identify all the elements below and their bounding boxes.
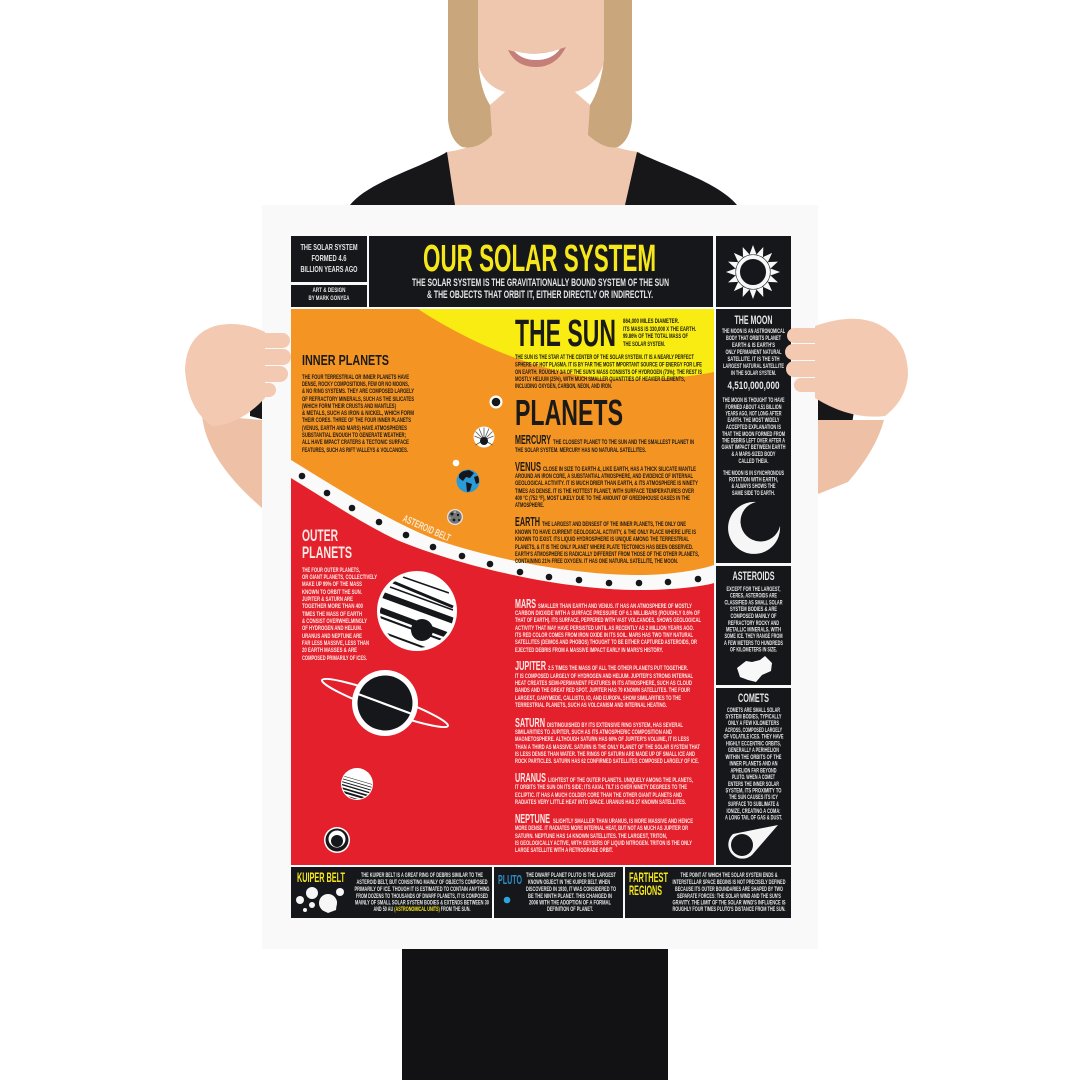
- text: jupiter: LARGEST, GANYMEDE, CALLISTO, IO, AND EUROPA, SHOW SIMILARITIES TO THE: [515, 695, 681, 702]
- icon: mercury: [490, 396, 502, 408]
- panel: title: & THE OBJECTS THAT ORBIT IT, EITHER DIRECTLY OR INDIRECTLY.: [427, 289, 653, 301]
- text: earth: CONTAINING 21% FREE OXYGEN. IT HAS ONE NATURAL SATELLITE, THE MOON.: [515, 558, 678, 565]
- text: inner planets: OF REFRACTORY MINERALS, SUCH AS THE SILICATES: [302, 396, 414, 403]
- panel: kuiper belt: MAINLY OF SMALL SOLAR SYSTEM BODIES & EXTENDS BETWEEN 30: [355, 900, 489, 906]
- text: outer planets: PLANETS: [302, 543, 352, 562]
- text: inner planets: ALL HAVE IMPACT CRATERS & TECTONIC SURFACE: [302, 439, 409, 446]
- panel: pluto: KNOWN OBJECT IN THE KUIPER BELT. WHEN: [528, 879, 610, 886]
- panel: pluto: BE THE NINTH PLANET. THIS CHANGED IN: [528, 893, 612, 900]
- panel: comets: COMETS ARE SMALL SOLAR: [727, 707, 780, 714]
- text: earth: KNOWN TO EXIST. ITS LIQUID HYDROSPHERE IS UNIQUE AMONG THE TERRESTRIAL: [515, 536, 689, 543]
- text: sun facts: 99.86% OF THE TOTAL MASS OF: [623, 333, 688, 340]
- panel: comets: PLUTO. WHEN A COMET: [732, 774, 775, 781]
- text: mars: THAT OF EARTH). ITS SURFACE, PEPPERED WITH VAST VOLCANOES, SHOWS GEOLOGICAL: [515, 617, 701, 624]
- icon: venus: [474, 426, 494, 448]
- panel: asteroids: OF KILOMETERS IN SIZE.: [730, 646, 777, 654]
- text: neptune: SATURN. NEPTUNE HAS 14 KNOWN SATELLITES. THE LARGEST, TRITON,: [515, 833, 667, 840]
- text: uranus: LIGHTEST OF THE OUTER PLANETS. UNIQUELY AMONG THE PLANETS,: [548, 777, 693, 784]
- text: mars: MARS: [515, 596, 536, 611]
- panel: kuiper belt: [291, 867, 492, 918]
- panel: kuiper belt: PRIMARILY OF ICE. THOUGH IT IS ESTIMATED TO CONTAIN ANYTHING: [354, 886, 490, 893]
- panel: kuiper belt: AND 50 AU (ASTRONOMICAL UNITS) FROM THE SUN.: [374, 906, 471, 913]
- label: asteroid belt: ASTEROID BELT: [401, 513, 453, 545]
- icon: earth: [456, 470, 481, 492]
- panel: asteroids: CLASSIFIED AS SMALL SOLAR: [724, 600, 783, 606]
- poster sheet: [262, 205, 818, 949]
- panel: the moon: THAT THE MOON FORMED FROM: [722, 431, 785, 438]
- icon: crescent moon: [728, 502, 780, 554]
- panel: pluto: PLUTO: [498, 872, 522, 887]
- panel: comets: A LONG TAIL OF GAS & DUST.: [725, 814, 782, 822]
- panel: pluto: DISCOVERED IN 1930, IT WAS CONSIDERED TO: [526, 886, 616, 893]
- panel: the moon: & ALWAYS SHOWS THE: [732, 483, 776, 490]
- text: sun facts: ITS MASS IS 330,000 X THE EARTH.: [623, 326, 696, 333]
- heading: planets: PLANETS: [515, 392, 623, 433]
- text: venus: TIMES AS DENSE. IT IS THE HOTTEST PLANET, WITH SURFACE TEMPERATURES OVER: [515, 488, 694, 495]
- panel: the moon: SATELLITE. IT IS THE 5TH: [728, 356, 780, 363]
- text: earth: KNOWN TO HAVE CURRENT GEOLOGICAL ACTIVITY, & THE ONLY PLACE WHERE LIFE IS: [515, 529, 696, 536]
- text: mercury: THE CLOSEST PLANET TO THE SUN AND THE SMALLEST PLANET IN: [553, 439, 694, 446]
- panel: pluto: THE DWARF PLANET PLUTO IS THE LARGEST: [526, 872, 616, 879]
- text: venus: CLOSE IN SIZE TO EARTH &, LIKE EARTH, HAS A THICK SILICATE MANTLE: [543, 466, 696, 473]
- text: jupiter: [515, 658, 693, 709]
- panel: the moon: THE MOON IS IN SYNCHRONOUS: [723, 470, 784, 477]
- text: earth: EARTH: [515, 514, 540, 529]
- text: uranus: [515, 770, 693, 806]
- panel: formation note: [291, 236, 367, 282]
- text: jupiter: 2.5 TIMES THE MASS OF ALL THE OTHER PLANETS PUT TOGETHER.: [548, 665, 688, 672]
- panel: comets: HIGHLY ECCENTRIC ORBITS,: [726, 740, 781, 748]
- panel: title: THE SOLAR SYSTEM IS THE GRAVITATIONALLY BOUND SYSTEM OF THE SUN: [412, 277, 669, 289]
- icon: comet: [728, 825, 778, 859]
- panel: the moon: BODY THAT ORBITS PLANET: [726, 335, 781, 342]
- panel: formation note: THE SOLAR SYSTEM: [300, 243, 358, 252]
- text: neptune: MORE DENSE. IT RADIATES MORE INTERNAL HEAT, BUT NOT AS MUCH AS JUPITER OR: [515, 825, 688, 832]
- panel: the moon: YEARS AGO, NOT LONG AFTER: [726, 410, 782, 418]
- panel: the moon: THE MOON IS AN ASTRONOMICAL: [722, 328, 785, 335]
- text: outer planets: COMPOSED PRIMARILY OF ICES.: [302, 655, 367, 662]
- panel: the moon: IN THE SOLAR SYSTEM.: [731, 370, 776, 377]
- text: venus: VENUS: [515, 459, 541, 474]
- panel: the moon: ACCEPTED EXPLANATION IS: [726, 424, 781, 431]
- text: neptune: LARGE SATELLITE WITH A RETROGRADE ORBIT.: [515, 847, 613, 854]
- text: outer planets: OF HYDROGEN AND HELIUM.: [302, 625, 362, 632]
- text: venus: GEOLOGICAL ACTIVITY. IT IS MUCH DRIER THAN EARTH, & ITS ATMOSPHERE IS NINETY: [515, 480, 698, 487]
- text: inner planets: (VENUS, EARTH AND MARS) HAVE ATMOSPHERES: [302, 425, 407, 432]
- panel: comets: THE SUN CAUSES ITS ICY: [729, 794, 778, 801]
- panel: farthest regions: FARTHEST: [629, 869, 668, 885]
- text: outer planets: THE FOUR OUTER PLANETS,: [302, 567, 360, 574]
- text: mars: [515, 596, 701, 654]
- text: mercury: THE SOLAR SYSTEM. MERCURY HAS NO NATURAL SATELLITES.: [515, 447, 646, 454]
- panel: credit: ART & DESIGN: [312, 287, 346, 294]
- panel: comets: APHELION FAR BEYOND: [730, 768, 777, 774]
- text: saturn: SATURN: [515, 715, 545, 730]
- panel: the moon: GIANT IMPACT BETWEEN EARTH: [722, 444, 786, 451]
- text: mars: ITS RED COLOR COMES FROM IRON OXIDE IN ITS SOIL. MARS HAS TWO TINY NATURAL: [515, 632, 693, 639]
- model hand: right: [785, 319, 908, 417]
- panel: farthest regions: GRAVITY. THE LIMIT OF THE SOLAR WIND'S INFLUENCE IS: [672, 900, 786, 906]
- panel: asteroids: COMPOSED MAINLY OF: [730, 613, 776, 620]
- text: mars: SATELLITES (DEIMOS AND PHOBOS) THOUGHT TO BE EITHER CAPTURED ASTEROIDS, OR: [515, 639, 697, 646]
- panel: pluto: DEFINITION OF PLANET.: [547, 906, 593, 913]
- panel: comets: SYSTEM BODIES, TYPICALLY: [726, 714, 782, 720]
- panel: asteroids: [716, 566, 791, 685]
- panel: comets: [716, 688, 791, 865]
- text: inner planets: [302, 352, 414, 454]
- text: sun facts: 864,000 MILES DIAMETER.: [623, 318, 679, 325]
- icon: asteroid: [737, 656, 772, 682]
- heading: the sun: THE SUN: [515, 313, 616, 355]
- panel: credit: BY MARK GONYEA: [308, 295, 350, 302]
- text: outer planets: KNOWN TO ORBIT THE SUN.: [302, 589, 362, 596]
- panel: title: OUR SOLAR SYSTEM: [423, 238, 656, 280]
- text: uranus: URANUS: [515, 770, 546, 785]
- text: jupiter: TERRESTRIAL PLANETS, SUCH AS VOLCANISM AND INTERNAL HEATING.: [515, 702, 667, 709]
- text: mars: EJECTED DEBRIS FROM A MASSIVE IMPACT EARLY IN MARS'S HISTORY.: [515, 647, 663, 654]
- text: saturn: SIMILARITIES TO JUPITER, SUCH AS ITS ATMOSPHERIC COMPOSITION AND: [515, 729, 672, 736]
- model hand: left: [185, 324, 291, 426]
- text: inner planets: THEIR CORES. THREE OF THE FOUR INNER PLANETS: [302, 417, 411, 424]
- icon: kuiper rocks: [296, 887, 344, 913]
- text: inner planets: SUBSTANTIAL ENOUGH TO GENERATE WEATHER;: [302, 432, 406, 439]
- panel: farthest regions: BECAUSE ITS OUTER BOUNDARIES ARE SHAPED BY TWO: [675, 886, 783, 893]
- text: saturn: IS LESS DENSE THAN WATER. THE RINGS OF SATURN ARE MADE UP OF SMALL ICE AND: [515, 751, 695, 758]
- panel: formation note: FORMED 4.6: [312, 254, 347, 263]
- panel: pluto: 2006 WITH THE ADOPTION OF A FORMAL: [529, 900, 611, 906]
- panel: the moon: [716, 309, 791, 563]
- panel: the moon: THE MOON IS THOUGHT TO HAVE: [722, 397, 785, 404]
- text: venus: AROUND AN IRON CORE, A SUBSTANTIAL ATMOSPHERE, AND EVIDENCE OF INTERNAL: [515, 473, 693, 480]
- panel: comets: COMETS: [738, 693, 769, 705]
- text: inner planets: & METALS, SUCH AS IRON & NICKEL, WHICH FORM: [302, 410, 414, 417]
- panel: comets: GENERALLY A PERIHELION: [728, 747, 779, 754]
- panel: farthest regions: SEPARATE FORCES: THE SOLAR WIND AND THE SUN'S: [677, 893, 781, 900]
- text: sun description: INCLUDING OXYGEN, CARBON, NEON, AND IRON.: [515, 383, 612, 390]
- text: mercury: MERCURY: [515, 432, 551, 447]
- text: uranus: ECLIPTIC. IT HAS A MUCH COLDER CORE THAN THE OTHER GIANT PLANETS AND: [515, 792, 682, 799]
- panel: kuiper belt: ASTEROID BELT, BUT CONSISTING MAINLY OF OBJECTS COMPOSED: [356, 879, 488, 886]
- text: mars: SMALLER THAN EARTH AND VENUS. IT HAS AN ATMOSPHERE OF MOSTLY: [538, 603, 692, 610]
- text: sun facts: [623, 318, 696, 348]
- text: saturn: DISTINGUISHED BY ITS EXTENSIVE RING SYSTEM, HAS SEVERAL: [547, 722, 683, 729]
- text: inner planets: THE FOUR TERRESTRIAL OR INNER PLANETS HAVE: [302, 374, 409, 381]
- panel: comets: IONIZE, CREATING A COMA:: [726, 808, 780, 815]
- panel: the moon: EARTH. THE MOST WIDELY: [728, 417, 780, 424]
- text: outer planets: [302, 526, 377, 662]
- text: sun description: THE SUN IS THE STAR AT THE CENTER OF THE SOLAR SYSTEM. IT IS A NEARLY PERFECT: [515, 354, 695, 361]
- text: jupiter: IT IS COMPOSED LARGELY OF HYDROGEN AND HELIUM. JUPITER'S STRONG INTERNAL: [515, 673, 693, 680]
- panel: the moon: ROTATION WITH EARTH,: [729, 476, 778, 484]
- panel: asteroids: METALLIC MINERALS, WITH: [726, 626, 781, 634]
- asteroid belt dots: [299, 473, 701, 586]
- panel: the moon: CALLED THEIA.: [738, 458, 769, 465]
- icon: neptune: [324, 827, 350, 853]
- text: jupiter: BANDS AND THE GREAT RED SPOT. JUPITER HAS 79 KNOWN SATELLITES. THE FOUR: [515, 687, 690, 694]
- icon: pluto: [504, 897, 510, 903]
- panel: comets: INNER PLANETS AND AN: [730, 760, 778, 768]
- panel: main solar background: [291, 309, 714, 865]
- text: sun description: [515, 354, 702, 390]
- text: jupiter: JUPITER: [515, 658, 546, 673]
- text: outer planets: OR GIANT PLANETS, COLLECTIVELY: [302, 574, 377, 581]
- panel: the moon: EARTH & IS EARTH'S: [732, 342, 775, 349]
- panel: kuiper belt: KUIPER BELT: [297, 869, 345, 885]
- icon: moon of earth: [453, 460, 459, 466]
- panel: comets: ONLY A FEW KILOMETERS: [728, 720, 779, 727]
- panel: the moon: THE MOON: [734, 315, 772, 327]
- text: sun description: SPHERE OF HOT PLASMA. IT IS BY FAR THE MOST IMPORTANT SOURCE OF ENERGY FOR LIFE: [515, 362, 702, 368]
- text: earth: EARTH'S ATMOSPHERE IS RADICALLY DIFFERENT FROM THOSE OF THE OTHER PLANETS,: [515, 551, 699, 558]
- text: saturn: [515, 715, 701, 765]
- text: outer planets: 20 EARTH MASSES & ARE: [302, 647, 357, 654]
- panel: asteroids: ASTEROIDS: [732, 571, 775, 583]
- text: neptune: IS GEOLOGICALLY ACTIVE, WITH GEYSERS OF LIQUID NITROGEN. TRITON IS THE ONLY: [515, 840, 692, 847]
- text: outer planets: URANUS AND NEPTUNE ARE: [302, 633, 362, 640]
- panel: kuiper belt: FROM DOZENS TO THOUSANDS OF DWARF PLANETS, IT IS COMPOSED: [356, 893, 488, 900]
- panel: comets: WITHIN THE ORBITS OF THE: [726, 754, 782, 761]
- panel: farthest regions: [625, 867, 791, 918]
- panel: asteroids: A FEW METERS TO HUNDREDS: [724, 640, 783, 647]
- text: saturn: THAN A THIRD AS MASSIVE. SATURN IS THE ONLY PLANET OF THE SOLAR SYSTEM THAT: [515, 744, 701, 751]
- panel: farthest regions: INTERSTELLAR SPACE BEGINS IS NOT PRECISELY DEFINED: [672, 879, 786, 886]
- panel: farthest regions: ROUGHLY FOUR TIMES PLUTO'S DISTANCE FROM THE SUN.: [672, 906, 786, 913]
- panel: the moon: SAME SIDE TO EARTH.: [732, 490, 775, 497]
- panel: the moon: 4,510,000,000: [728, 380, 780, 392]
- panel: the moon: & A MARS-SIZED BODY: [732, 451, 776, 458]
- text: mars: CARBON DIOXIDE WITH A SURFACE PRESSURE OF 6.1 MILLIBARS (ROUGHLY 0.6% OF: [515, 610, 700, 617]
- text: outer planets: TIMES THE MASS OF EARTH: [302, 611, 362, 618]
- panel: formation note: BILLION YEARS AGO: [300, 265, 358, 274]
- panel: farthest regions: REGIONS: [629, 882, 662, 898]
- text: sun facts: THE SOLAR SYSTEM.: [623, 341, 665, 348]
- text: sun description: MOSTLY HELIUM (25%), WITH MUCH SMALLER QUANTITIES OF HEAVIER ELEMENTS,: [515, 376, 685, 383]
- icon: saturn: [319, 670, 451, 736]
- panel: comets: SYSTEM, ITS PROXIMITY TO: [726, 788, 782, 794]
- text: uranus: IT ORBITS THE SUN ON ITS SIDE; ITS AXIAL TILT IS OVER NINETY DEGREES TO THE: [515, 784, 687, 791]
- text: mars: ACTIVITY THAT MAY HAVE PERSISTED UNTIL AS RECENTLY AS 2 MILLION YEARS AGO.: [515, 625, 694, 632]
- panel: asteroids: EXCEPT FOR THE LARGEST,: [726, 586, 781, 593]
- text: outer planets: & CONSIST OVERWHELMINGLY: [302, 618, 367, 625]
- text: outer planets: JUPITER & SATURN ARE: [302, 596, 353, 603]
- panel: comets: ENTERS THE INNER SOLAR: [728, 781, 779, 788]
- text: venus: 400 °C (752 °F), MOST LIKELY DUE TO THE AMOUNT OF GREENHOUSE GASES IN THE: [515, 494, 690, 502]
- text: outer planets: FAR LESS MASSIVE, LESS THAN: [302, 640, 369, 647]
- text: outer planets: MAKE UP 99% OF THE MASS: [302, 581, 362, 588]
- text: saturn: ROCK PARTICLES. SATURN HAS 62 CONFIRMED SATELLITES COMPOSED LARGELY OF ICE.: [515, 758, 699, 765]
- panel: asteroids: SOME ICE. THEY RANGE FROM: [724, 633, 783, 640]
- text: inner planets: (WHICH FORM THEIR CRUSTS AND MANTLES): [302, 403, 396, 410]
- text: mercury: [515, 432, 694, 454]
- text: sun description: ON EARTH. ROUGHLY 3/4 OF THE SUN'S MASS CONSISTS OF HYDROGEN (73%); THE REST IS: [515, 369, 702, 376]
- panel: comets: SURFACE TO SUBLIMATE &: [728, 801, 779, 808]
- panel: the moon: ONLY PERMANENT NATURAL: [726, 349, 782, 356]
- icon: jupiter: [377, 571, 457, 651]
- text: outer planets: OUTER: [302, 526, 338, 545]
- panel: farthest regions: THE POINT AT WHICH THE SOLAR SYSTEM ENDS &: [680, 872, 778, 879]
- text: uranus: RADIATES VERY LITTLE HEAT INTO SPACE. URANUS HAS 27 KNOWN SATELLITES.: [515, 799, 686, 806]
- text: saturn: MAGNETOSPHERE. ALTHOUGH SATURN HAS 60% OF JUPITER'S VOLUME, IT IS LESS: [515, 736, 689, 743]
- text: inner planets: INNER PLANETS: [302, 352, 389, 369]
- text: venus: [515, 459, 698, 509]
- icon: mars: [447, 509, 463, 525]
- text: inner planets: & NO RING SYSTEMS. THEY ARE COMPOSED LARGELY: [302, 388, 414, 395]
- panel: comets: ACROSS, COMPOSED LARGELY: [725, 727, 782, 734]
- panel: asteroids: SYSTEM BODIES & ARE: [730, 606, 777, 613]
- icon: uranus: [341, 768, 373, 800]
- panel: sun icon: [716, 236, 791, 307]
- panel: pluto: [494, 867, 623, 918]
- text: earth: [515, 514, 699, 565]
- text: inner planets: DENSE, ROCKY COMPOSITIONS, FEW OR NO MOONS,: [302, 381, 409, 388]
- model behind poster: [202, 0, 884, 1080]
- panel: the moon: LARGEST NATURAL SATELLITE: [723, 363, 784, 370]
- text: earth: THE LARGEST AND DENSEST OF THE INNER PLANETS, THE ONLY ONE: [542, 521, 686, 528]
- panel: the moon: THE DEBRIS LEFT OVER AFTER A: [722, 438, 785, 444]
- panel: asteroids: CERES, ASTEROIDS ARE: [730, 592, 777, 600]
- panel: the moon: FORMED ABOUT 4.51 BILLION: [726, 404, 782, 411]
- text: venus: ATMOSPHERE.: [515, 502, 544, 509]
- text: jupiter: HEAT CREATES SEMI-PERMANENT FEATURES IN ITS ATMOSPHERE, SUCH AS CLOUD: [515, 680, 692, 687]
- panel: asteroids: REFRACTORY ROCKY AND: [728, 620, 779, 627]
- panel: kuiper belt: THE KUIPER BELT IS A GREAT RING OF DEBRIS SIMILAR TO THE: [361, 872, 483, 879]
- text: inner planets: FEATURES, SUCH AS RIFT VALLEYS & VOLCANOES.: [302, 447, 408, 454]
- text: neptune: NEPTUNE: [515, 811, 550, 826]
- panel: comets: OF VOLATILE ICES. THEY HAVE: [724, 734, 784, 740]
- text: neptune: SLIGHTLY SMALLER THAN URANUS, IS MORE MASSIVE AND HENCE: [553, 818, 693, 825]
- panel: credit: [291, 285, 367, 307]
- text: neptune: [515, 811, 693, 854]
- text: outer planets: TOGETHER MORE THAN 400: [302, 603, 363, 610]
- text: earth: PLANETS, & IT IS THE ONLY PLANET WHERE PLATE TECTONICS HAS BEEN OBSERVED.: [515, 544, 693, 551]
- panel: title: [369, 236, 713, 307]
